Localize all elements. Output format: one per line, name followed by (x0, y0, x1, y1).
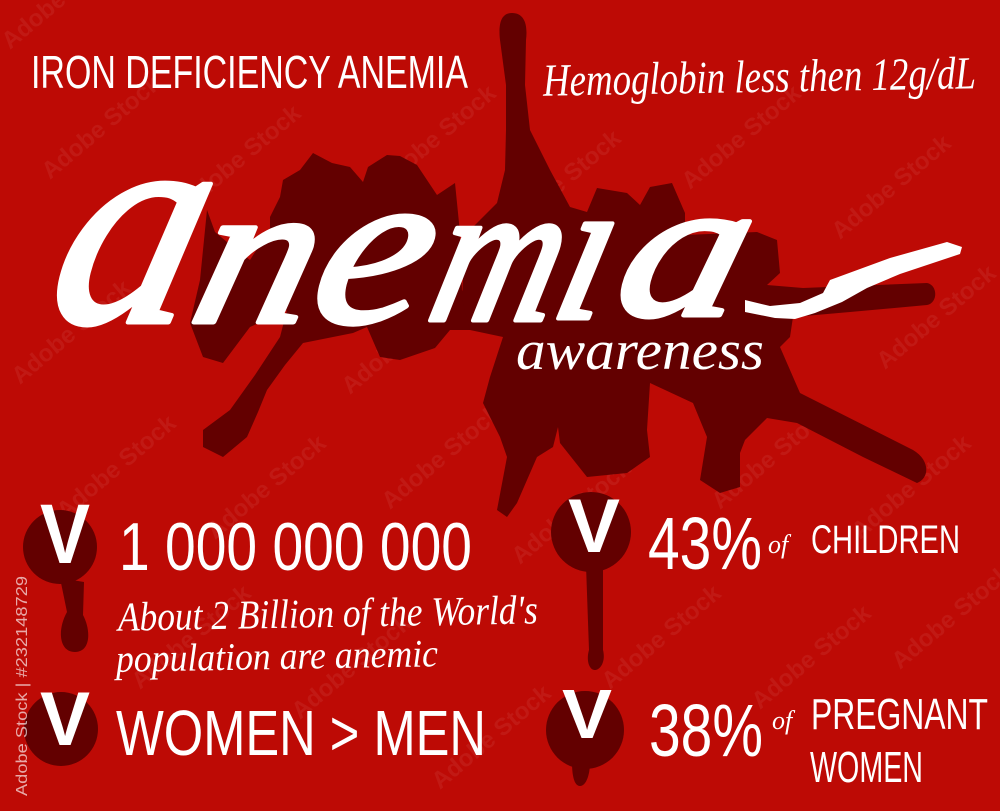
text: Adobe Stock (847, 429, 977, 545)
icon: blood drop check (24, 677, 98, 766)
stock credit: Adobe Stock | #232148729 (14, 576, 31, 796)
icon: blood drop check: V (562, 675, 612, 753)
text: Adobe Stock (747, 599, 877, 715)
text: Adobe Stock (677, 79, 807, 195)
text: Adobe Stock (52, 409, 182, 525)
text: Adobe Stock (707, 399, 837, 515)
text: Adobe Stock (337, 284, 467, 400)
label: of (768, 530, 792, 559)
text: Adobe Stock (372, 79, 502, 195)
icon: blood drop check: V (568, 484, 620, 569)
icon: blood drop check (23, 487, 97, 652)
text: Adobe Stock (497, 124, 627, 240)
main heading: anemia: a (599, 137, 779, 358)
title: iron deficiency anemia: IRON DEFICIENCY ANEMIA (31, 46, 468, 98)
icon: blood drop check (546, 675, 624, 786)
text: Adobe Stock (37, 69, 167, 185)
blood splatter blot (190, 13, 935, 517)
fact: one billion (23, 487, 538, 681)
text: Adobe Stock (287, 609, 417, 725)
number: 1 000 000 000 (119, 509, 472, 585)
main heading: anemia: m (413, 142, 593, 363)
icon: blood drop check: V (40, 677, 90, 762)
fact: one billion: population are anemic (113, 632, 438, 681)
main heading: anemia (26, 59, 962, 386)
text: Adobe Stock (597, 579, 727, 695)
main heading: anemia: i (537, 137, 645, 363)
fact: children (551, 484, 960, 670)
text: Adobe Stock (872, 259, 1000, 375)
main heading: anemia: e (293, 122, 467, 371)
percentage: 43% (648, 502, 762, 585)
label: of (772, 706, 796, 735)
fact: pregnant women (546, 675, 988, 792)
text: Adobe Stock (127, 579, 257, 695)
main heading: anemia: n (175, 141, 349, 367)
text: Adobe Stock (827, 129, 957, 245)
fact: pregnant women: WOMEN (810, 743, 923, 792)
text: Adobe Stock (507, 454, 637, 570)
text: Adobe Stock (202, 429, 332, 545)
brush stroke tail (745, 242, 962, 319)
percentage: 38% (649, 689, 763, 772)
subheading: awareness: awareness (516, 320, 764, 382)
text: Adobe Stock (177, 99, 307, 215)
text: Adobe Stock (427, 679, 557, 795)
icon: blood drop check: V (40, 487, 90, 581)
main heading: anemia: a (26, 59, 253, 386)
comparison: WOMEN > MEN (116, 697, 486, 769)
text: Adobe Stock (377, 399, 507, 515)
fact: women vs men (24, 677, 486, 769)
text: Adobe Stock (7, 274, 137, 390)
icon: blood drop check (551, 484, 631, 670)
description: About 2 Billion of the World's (115, 586, 538, 640)
